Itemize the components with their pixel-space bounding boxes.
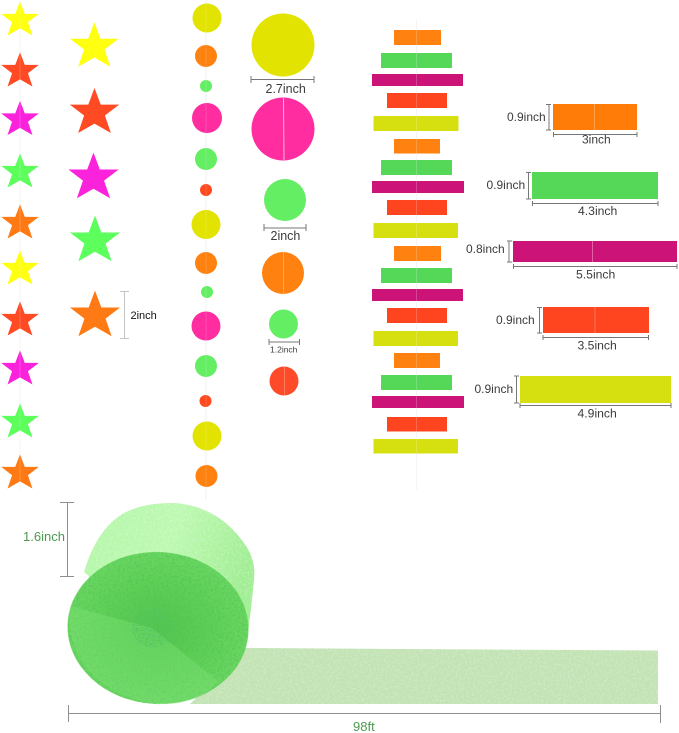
strip: orange [394,139,440,154]
star: yellow [1,1,39,35]
sized strip: green 4.300inch by 0.9inch [486,172,658,218]
rectangle garland strand [372,20,464,490]
star: red [1,301,39,335]
strip: red [387,93,447,108]
strip: lime [374,331,458,346]
strip: orange [394,30,441,45]
star size dimension: 2inch [120,292,157,338]
circle: green [200,80,212,92]
star garland strand [1,0,39,490]
lighter wedge of roll face [69,606,218,704]
sized strip: green 4.300inch by 0.9inch: 0.9inch [486,178,525,192]
roll length dimension: 98ft [68,705,660,733]
sized strip: lime 4.900inch by 0.9inch: 4.9inch [578,406,617,420]
large circle: red [270,366,298,396]
circle: orange [195,252,217,274]
large circle: pink [252,98,314,160]
circle: green [195,355,217,377]
circle: orange [195,45,217,67]
large stars column [68,22,120,336]
strip: green [381,268,452,283]
sized strip: lime 4.900inch by 0.9inch: 0.9inch [474,382,513,396]
crepe paper roll [64,503,254,709]
strip: magenta [372,181,464,193]
strip: magenta [372,396,464,408]
circle dimension: 2.7inch: 2.7inch [266,82,306,96]
circle: yellow [192,422,222,450]
roll body [84,503,254,640]
circle: orange [196,465,218,487]
sized strip: orange 3inch by 0.9inch: 3inch [582,132,611,146]
circle: red [200,395,212,407]
circle: green [201,286,213,298]
circle dimension: 1.2inch [269,339,300,354]
strip: green [381,53,452,68]
circle: green [195,148,217,170]
sized strip: red 3.500inch by 0.9inch [496,307,649,352]
strip: magenta [372,289,463,301]
strip: red [387,308,447,323]
roll height dimension: 1.6inch: 1.6inch [23,529,65,544]
roll end face [64,547,252,709]
large circle: green [264,179,306,221]
large star: orange [70,291,120,336]
sized strip: magenta 5.500inch by 0.8inch: 5.5inch [576,268,615,282]
star: green [1,403,39,437]
circle garland strand [192,0,222,500]
roll height dimension: 1.6inch [23,502,74,576]
strip: green [381,375,452,390]
sized strip: lime 4.900inch by 0.9inch [474,376,671,420]
large star: red [70,88,119,133]
star: magenta [1,101,39,135]
large circle: green small [269,310,298,338]
circle: pink [192,312,220,340]
strip: green [381,160,452,175]
strip: lime [374,223,458,238]
star: red [1,52,39,86]
sized strip: red 3.500inch by 0.9inch: 0.9inch [496,313,535,327]
star: orange [1,204,39,238]
large star: green [70,216,120,261]
strip: red [387,200,447,215]
circle dimension: 2.7inch [251,76,314,96]
circle: yellow [192,4,222,32]
large star: yellow [70,22,119,67]
large circle: orange [262,252,304,294]
circle: yellow [192,210,220,239]
large circles column [252,14,314,396]
strip: magenta [372,74,463,86]
circle dimension: 1.2inch: 1.2inch [270,344,298,354]
sized strip: orange 3inch by 0.9inch: 0.9inch [507,110,546,124]
large star: magenta [68,153,119,198]
sized strip: red 3.500inch by 0.9inch: 3.5inch [578,338,617,352]
strip: red [387,417,447,432]
star: green [1,153,39,187]
large circle: yellow [252,14,314,76]
strip: orange [394,246,441,261]
strip: lime [374,116,458,131]
strip: orange [394,353,440,368]
sized strip: magenta 5.500inch by 0.8inch [466,241,677,282]
sized strip: orange 3inch by 0.9inch [507,104,637,146]
strip: lime [374,439,458,454]
circle: red [200,184,212,196]
circle: pink [192,103,222,133]
circle dimension: 2inch: 2inch [270,229,300,243]
star: yellow [1,250,39,284]
crepe paper streamer strip [190,648,658,704]
sized strip: magenta 5.500inch by 0.8inch: 0.8inch [466,242,505,256]
star size dimension: 2inch: 2inch [130,310,157,322]
sized strip: green 4.300inch by 0.9inch: 4.3inch [578,204,617,218]
circle dimension: 2inch [264,224,306,243]
star: orange [1,454,39,488]
star: magenta [1,350,39,384]
roll core speckles [132,609,176,647]
